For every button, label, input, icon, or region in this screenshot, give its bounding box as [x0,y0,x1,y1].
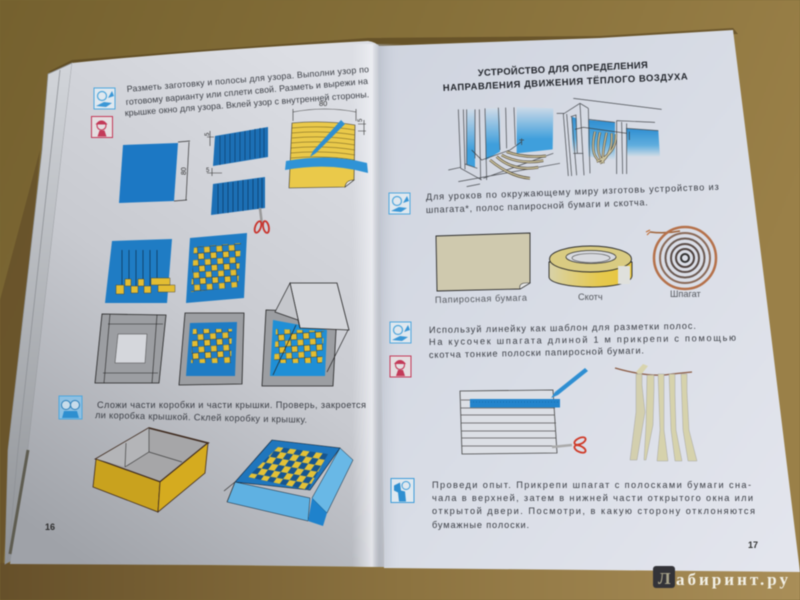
instruction: experiment: открытой двери. Посмотри, в какую сторону отклоняются [432,506,755,516]
icon: blue child [389,193,410,214]
background: bottom table strip [0,563,800,600]
shadow above book [48,28,738,72]
watermark logo: Л [658,569,671,588]
icon: scissors [552,436,587,454]
finished woven square [186,233,247,303]
icon: blue child [390,322,411,343]
left page instructions text: готовому варианту или сплети свой. Разметь и вырежи на [125,76,368,107]
yellow ruled sheet with ruler and pencil: 5 [358,118,364,122]
yellow ruled sheet with ruler and pencil: 80 [319,99,327,108]
icon: red child [92,116,112,138]
left page second instruction [95,400,366,425]
watermark logo [653,566,788,589]
frame with woven window [179,313,244,385]
grey box frame [95,314,166,383]
watermark logo: абиринт.ру [676,570,788,589]
instruction: materials: Для уроков по окружающему миру изготовь устройство из [426,182,719,202]
blue square blank with 80 dimension: 80 [181,167,188,175]
left page second instruction: Сложи части коробки и части крышки. Проверь, закроется [97,400,366,410]
left page [10,41,384,567]
coiled twine [646,227,716,289]
ruled paper with ruler [460,390,560,454]
icon: pencil [551,368,588,398]
label: tape: Скотч [578,292,603,302]
illustration: door with paper strips [448,107,560,187]
instruction: ruler and strips: На кусочек шпагата длиной 1 м прикрепи с помощью [429,333,736,347]
label: tissue paper: Папиросная бумага [435,293,528,305]
illustration: window with paper strips [557,98,662,176]
title: УСТРОЙСТВО ДЛЯ ОПРЕДЕЛЕНИЯ [478,59,648,78]
striped blue strip upper [205,127,268,176]
instruction: experiment: бумажные полоски. [432,520,529,530]
frame with lifted flap and arrows [262,283,349,386]
instruction: experiment: Проведи опыт. Прикрепи шпагат с полосками бумаги сна- [432,480,751,490]
left page instructions text: крышке окно для узора. Вклей узор с внутренней стороны. [124,89,369,118]
roll of tape [549,246,632,287]
page number 17: 17 [748,540,758,550]
title [443,59,688,93]
open yellow box [93,428,208,512]
left page second instruction: ли коробка крышкой. Склей коробку и крышку. [95,410,307,425]
page number 16: 16 [45,522,55,532]
right page [378,30,800,572]
instruction: ruler and strips: Используй линейку как шаблон для разметки полос. [429,321,696,335]
striped blue strip upper: 5 [205,132,211,136]
instruction: ruler and strips: скотча тонкие полоски папиросной бумаги. [429,345,644,360]
icon: scissors on blue strip [253,208,270,234]
twine with hanging paper strips [615,364,697,461]
woven pattern in progress [105,239,175,303]
instruction: experiment [432,480,755,530]
instruction: experiment: чала в верхней, затем в нижней части открытого окна или [432,493,753,503]
striped blue strip upper: 5 [206,168,210,174]
background: dark lower-left table [0,150,40,600]
left page instructions text: Разметь заготовку и полосы для узора. Выполни узор по [126,64,369,94]
instruction: materials: шпагата*, полос папиросной бумаги и скотча. [426,197,648,215]
icon: two children [59,396,82,419]
book spine highlight [352,44,402,567]
left page instructions text [124,64,369,118]
striped blue strip lower [211,177,265,215]
instruction: ruler and strips [429,321,736,360]
icon: experiment child [391,478,414,502]
title: НАПРАВЛЕНИЯ ДВИЖЕНИЯ ТЁПЛОГО ВОЗДУХА [443,70,688,93]
icon: red child [390,356,411,377]
icon: blue child [94,88,115,109]
label: twine: Шпагат [670,289,702,299]
instruction: materials [426,182,719,215]
blue square blank with 80 dimension [119,141,190,203]
yellow ruled sheet with ruler and pencil [285,99,368,188]
dark edge of left page [10,450,28,554]
page stack edge [5,63,72,564]
blue lid with woven window [224,440,353,526]
tissue paper sheet [436,233,530,291]
